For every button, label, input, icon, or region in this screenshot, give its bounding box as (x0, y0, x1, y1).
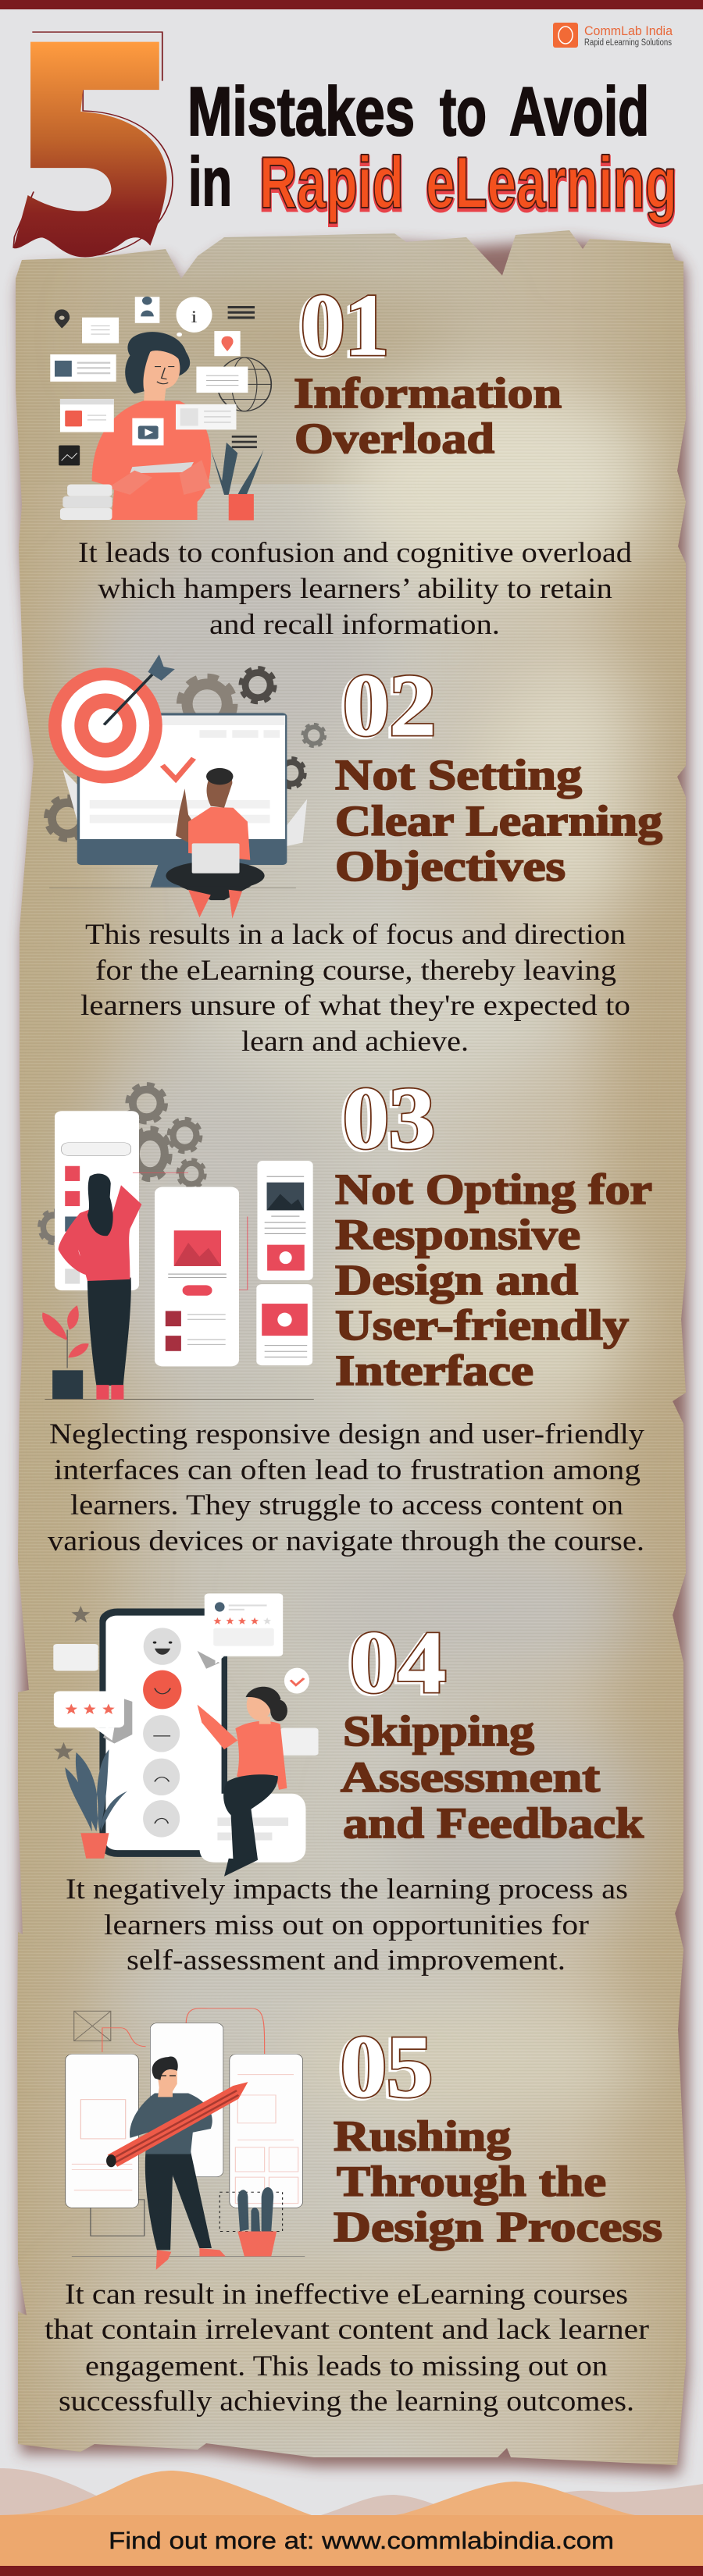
heading 05 (334, 2019, 662, 2250)
footer link text: Find out more at: www.commlabindia.com (109, 2527, 614, 2554)
text block 4 (66, 1873, 628, 1976)
title: Rushing Through the Design Process (334, 2112, 662, 2250)
title: Not Opting for Responsive Design and User-friendly Interface (335, 1165, 652, 1394)
text block 5: that contain irrelevant content and lack learner (45, 2314, 649, 2346)
text block 3: learners. They struggle to access content on (70, 1489, 623, 1521)
logo: CommLab India (584, 23, 673, 38)
title: Skipping Assessment and Feedback: Assessment (341, 1753, 601, 1801)
number 03: 03 (341, 1072, 433, 1169)
number 02: 02 (343, 657, 436, 754)
title: Not Setting Clear Learning Objectives: Clear Learning (335, 797, 662, 845)
number 01: 01 (301, 277, 389, 374)
illustration 4: assessment and feedback (53, 1593, 319, 1877)
text block 3: Neglecting responsive design and user-friendly (49, 1418, 645, 1450)
number 01: 01 (301, 277, 389, 374)
title (187, 73, 677, 226)
title: Not Opting for Responsive Design and User-friendly Interface: Responsive (335, 1211, 580, 1258)
text block 4: self-assessment and improvement. (127, 1944, 566, 1976)
number 05: 05 (338, 2020, 430, 2117)
text block 1: which hampers learners’ ability to retain (98, 573, 612, 605)
title: Not Opting for Responsive Design and User-friendly Interface: User-friendly (335, 1301, 629, 1349)
title: Not Setting Clear Learning Objectives: Objectives (335, 842, 566, 890)
illustration 3: responsive design (40, 1084, 314, 1400)
big number 5 (13, 32, 173, 257)
title: Information Overload: Overload (294, 415, 494, 462)
title: Rushing Through the Design Process: Rushing (334, 2112, 511, 2160)
heading 04 (341, 1614, 644, 1847)
bottom bar (0, 2566, 703, 2576)
title: Rushing Through the Design Process: Through the (337, 2158, 606, 2205)
title: Avoid (509, 73, 649, 150)
title: Skipping Assessment and Feedback: Skipping (343, 1707, 534, 1755)
logo (553, 23, 673, 48)
illustration 1: information overload (50, 297, 271, 520)
text block 3: various devices or navigate through the course. (48, 1525, 644, 1557)
heading 02 (335, 657, 662, 890)
text block 2: learners unsure of what they're expected to (80, 990, 630, 1022)
title: Rapid (259, 144, 404, 226)
text block 5: successfully achieving the learning outcomes. (59, 2386, 634, 2418)
number 04: 04 (350, 1614, 446, 1711)
illustration 1: information overload: i (191, 307, 198, 326)
title: Not Opting for Responsive Design and User-friendly Interface: Not Opting for (335, 1165, 652, 1213)
text block 3 (48, 1418, 645, 1557)
text block 4: learners miss out on opportunities for (104, 1909, 589, 1941)
text block 2 (80, 919, 630, 1058)
text block 5 (45, 2279, 649, 2418)
text block 3: interfaces can often lead to frustration among (54, 1454, 641, 1486)
text block 1: and recall information. (209, 609, 500, 641)
text block 2: for the eLearning course, thereby leaving (95, 955, 616, 987)
text block 2: learn and achieve. (241, 1026, 469, 1058)
number 01: 01 (298, 279, 387, 375)
title: Rushing Through the Design Process: Design Process (334, 2203, 662, 2250)
title: Skipping Assessment and Feedback (341, 1707, 644, 1847)
text block 1 (78, 537, 633, 641)
title: Skipping Assessment and Feedback: and Feedback (343, 1799, 644, 1847)
illustration 2: target and monitor (47, 654, 325, 919)
title: Not Setting Clear Learning Objectives: Not Setting (335, 751, 582, 799)
title: Information Overload (294, 369, 562, 462)
title: Not Setting Clear Learning Objectives (335, 751, 662, 890)
title: in (188, 143, 232, 220)
illustration 5: design process (66, 2008, 305, 2270)
text block 1: It leads to confusion and cognitive overload (78, 537, 633, 569)
title: to (440, 73, 487, 150)
number 05: 05 (341, 2019, 433, 2115)
title: Rapid (259, 141, 404, 223)
text block 4: It negatively impacts the learning process as (66, 1873, 628, 1905)
number 02: 02 (343, 657, 436, 754)
title: Information Overload: Information (294, 369, 562, 417)
footer waves (0, 2468, 703, 2576)
top bar (0, 0, 703, 9)
number 04: 04 (348, 1616, 444, 1713)
text block 5: engagement. This leads to missing out on (85, 2350, 608, 2382)
heading 03 (335, 1070, 652, 1394)
heading 01 (294, 277, 562, 462)
text block 2: This results in a lack of focus and direction (85, 919, 626, 951)
title: Mistakes (187, 73, 415, 150)
number 03: 03 (343, 1070, 435, 1167)
number 03: 03 (343, 1070, 435, 1167)
number 05: 05 (341, 2019, 433, 2115)
title: Not Opting for Responsive Design and User-friendly Interface: Design and (335, 1256, 578, 1304)
number 02: 02 (341, 659, 434, 756)
logo: Rapid eLearning Solutions (584, 38, 672, 48)
title: Not Opting for Responsive Design and User-friendly Interface: Interface (335, 1347, 533, 1394)
number 04: 04 (350, 1614, 446, 1711)
text block 5: It can result in ineffective eLearning courses (65, 2279, 628, 2311)
